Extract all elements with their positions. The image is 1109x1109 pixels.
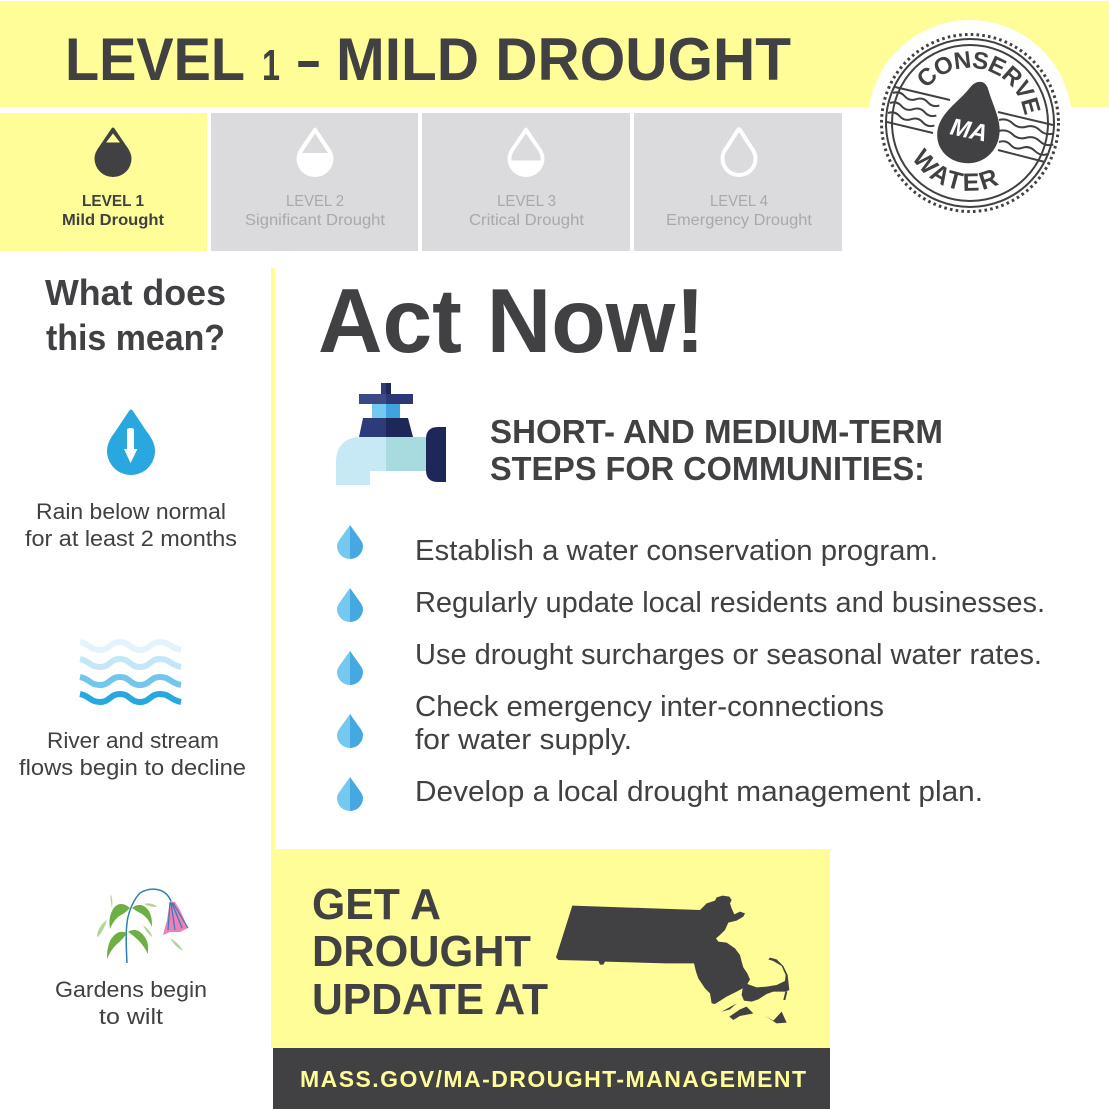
text: rain: Rain below normal bbox=[36, 499, 226, 524]
level 2 label bbox=[245, 193, 386, 229]
level 2 label: Significant Drought bbox=[245, 212, 386, 229]
badge text bbox=[914, 51, 1041, 191]
badge drop bbox=[937, 82, 1000, 163]
call to action heading: GET A bbox=[312, 880, 441, 929]
level 1 tile bbox=[0, 113, 207, 251]
text: rain bbox=[25, 499, 237, 551]
title: – bbox=[297, 26, 320, 93]
level 4 label: LEVEL 4 bbox=[710, 193, 768, 210]
text: rivers: River and stream bbox=[47, 728, 219, 753]
level 4 label bbox=[666, 193, 813, 229]
left column heading: this mean? bbox=[46, 317, 225, 358]
title: 1 bbox=[262, 41, 280, 90]
level 4 tile bbox=[634, 113, 842, 251]
icon: level 1 drop bbox=[94, 128, 132, 177]
list of steps: Check emergency inter-connections bbox=[415, 691, 884, 723]
list of steps: Use drought surcharges or seasonal water rates. bbox=[415, 639, 1042, 671]
text: rivers: flows begin to decline bbox=[19, 755, 246, 780]
call to action heading: UPDATE AT bbox=[312, 975, 548, 1024]
title bbox=[65, 26, 791, 93]
icon: rain drop with down arrow bbox=[107, 410, 155, 475]
left column heading bbox=[45, 272, 226, 358]
header band bbox=[0, 1, 1109, 107]
map: Massachusetts bbox=[556, 896, 789, 1023]
url band: MASS.GOV/MA-DROUGHT-MANAGEMENT bbox=[300, 1066, 806, 1092]
list of steps: Establish a water conservation program. bbox=[415, 535, 938, 567]
badge drop: MA bbox=[948, 113, 990, 148]
level 4 label: Emergency Drought bbox=[666, 212, 813, 229]
level 3 label bbox=[469, 193, 585, 229]
level 2 tile bbox=[211, 113, 418, 251]
icon: level 3 drop bbox=[508, 128, 544, 177]
text: gardens: Gardens begin bbox=[55, 977, 207, 1002]
icon: water tap bbox=[336, 383, 446, 485]
icon: wilting flower bbox=[97, 889, 188, 963]
level 2 label: LEVEL 2 bbox=[286, 193, 344, 210]
level 3 label: LEVEL 3 bbox=[497, 193, 556, 210]
badge text: CONSERVE bbox=[918, 51, 1041, 115]
level 1 label: LEVEL 1 bbox=[82, 193, 144, 210]
text: gardens bbox=[55, 977, 207, 1029]
level 1 label bbox=[62, 193, 165, 229]
icon: level 2 drop bbox=[296, 128, 334, 177]
level 3 label: Critical Drought bbox=[469, 212, 585, 229]
icon: level 4 drop bbox=[722, 129, 756, 175]
panel: call to action bbox=[271, 268, 830, 1048]
list of steps: for water supply. bbox=[415, 724, 632, 756]
call to action heading: DROUGHT bbox=[312, 927, 531, 976]
text: rain: for at least 2 months bbox=[25, 526, 237, 551]
text: gardens: to wilt bbox=[99, 1004, 164, 1029]
badge text: WATER bbox=[914, 147, 999, 191]
steps heading: SHORT- AND MEDIUM-TERM bbox=[490, 413, 943, 450]
level 1 label: Mild Drought bbox=[62, 212, 165, 229]
list of steps bbox=[415, 535, 1045, 808]
title: LEVEL bbox=[65, 26, 245, 93]
url band bbox=[273, 1048, 830, 1109]
level 3 tile bbox=[422, 113, 630, 251]
call to action heading bbox=[312, 880, 548, 1024]
left column heading: What does bbox=[45, 272, 226, 313]
title: MILD DROUGHT bbox=[336, 26, 791, 93]
steps heading bbox=[490, 413, 943, 487]
steps heading: STEPS FOR COMMUNITIES: bbox=[490, 450, 925, 487]
icon: waves bbox=[80, 642, 181, 702]
text: rivers bbox=[19, 728, 246, 780]
bullet drops bbox=[337, 525, 363, 811]
list of steps: Regularly update local residents and businesses. bbox=[415, 587, 1045, 619]
badge: Conserve MA Water bbox=[869, 20, 1071, 213]
list of steps: Develop a local drought management plan. bbox=[415, 776, 983, 808]
main heading: Act Now! bbox=[318, 271, 705, 372]
